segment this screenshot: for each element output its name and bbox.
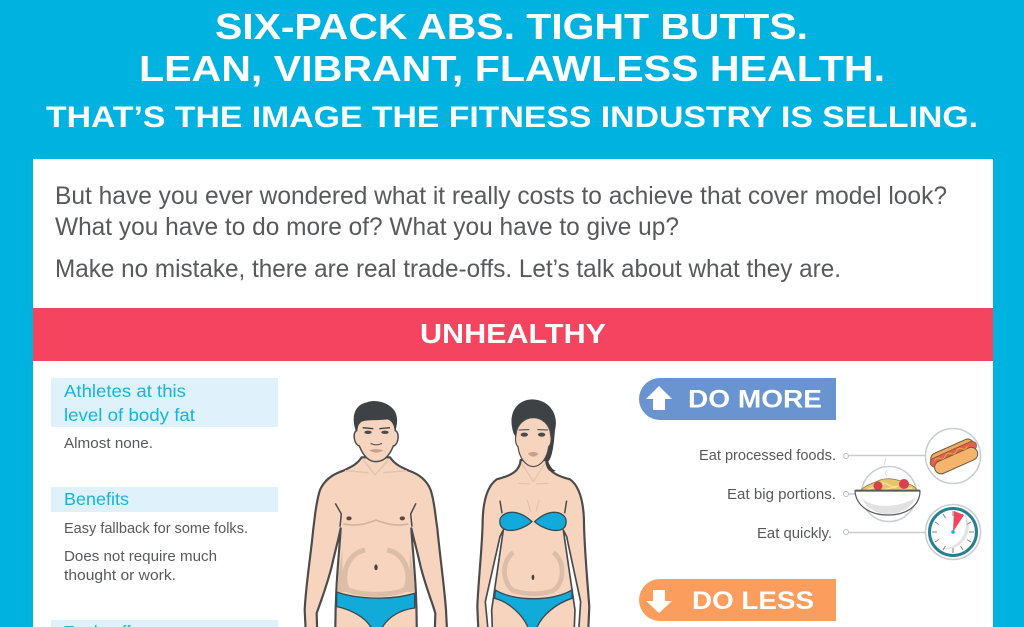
banner: unhealthy: UNHEALTHY — [420, 318, 606, 349]
icon: down arrow — [646, 590, 672, 613]
title: LEAN, VIBRANT, FLAWLESS HEALTH. — [139, 48, 885, 89]
list: eat big portions — [727, 458, 920, 522]
list: eat big portions: Eat big portions. — [727, 486, 836, 503]
title — [46, 6, 978, 134]
illustration: woman — [477, 399, 589, 627]
text block: intro — [55, 182, 947, 283]
panel: benefits: thought or work. — [64, 568, 176, 584]
woman: bikini bottom — [495, 590, 572, 627]
title: THAT’S THE IMAGE THE FITNESS INDUSTRY IS SELLING. — [46, 101, 978, 134]
banner: unhealthy — [33, 308, 993, 361]
woman: head — [511, 399, 556, 472]
list: eat processed foods — [699, 428, 982, 484]
list: eat quickly — [757, 504, 980, 560]
panel: athletes at this level — [51, 378, 278, 452]
panel: athletes at this level: level of body fat — [64, 405, 195, 425]
icon: stopwatch clock — [926, 504, 980, 560]
badge: do more — [639, 378, 836, 420]
icon: pasta bowl — [855, 458, 920, 522]
badge: do more: DO MORE — [688, 386, 822, 414]
woman: bikini top — [500, 501, 567, 530]
panel: benefits: Benefits — [64, 489, 129, 509]
woman: gaps between arms and torso — [485, 530, 503, 627]
illustration: man — [305, 401, 447, 627]
badge: do less — [639, 579, 836, 621]
man: head — [354, 401, 398, 462]
panel: trade-offs — [51, 620, 278, 627]
text block: intro: Make no mistake, there are real trade-offs. Let’s talk about what they are. — [55, 255, 841, 283]
man: underwear — [337, 592, 415, 627]
icon: hot dog — [926, 428, 982, 484]
icon: up arrow — [646, 386, 672, 410]
panel: athletes at this level: Almost none. — [64, 436, 153, 452]
list: eat quickly: Eat quickly. — [757, 525, 832, 542]
text block: intro: What you have to do more of? What you have to give up? — [55, 213, 679, 241]
panel: athletes at this level: Athletes at this — [64, 381, 186, 401]
badge: do less: DO LESS — [692, 587, 814, 615]
panel: main content — [33, 159, 993, 627]
list: eat processed foods: Eat processed foods. — [699, 447, 836, 464]
text block: intro: But have you ever wondered what it really costs to achieve that cover model look? — [55, 182, 947, 210]
panel: benefits: Easy fallback for some folks. — [64, 521, 248, 537]
panel: benefits — [51, 487, 278, 584]
panel: benefits: Does not require much — [64, 549, 217, 565]
title: SIX-PACK ABS. TIGHT BUTTS. — [215, 6, 808, 47]
